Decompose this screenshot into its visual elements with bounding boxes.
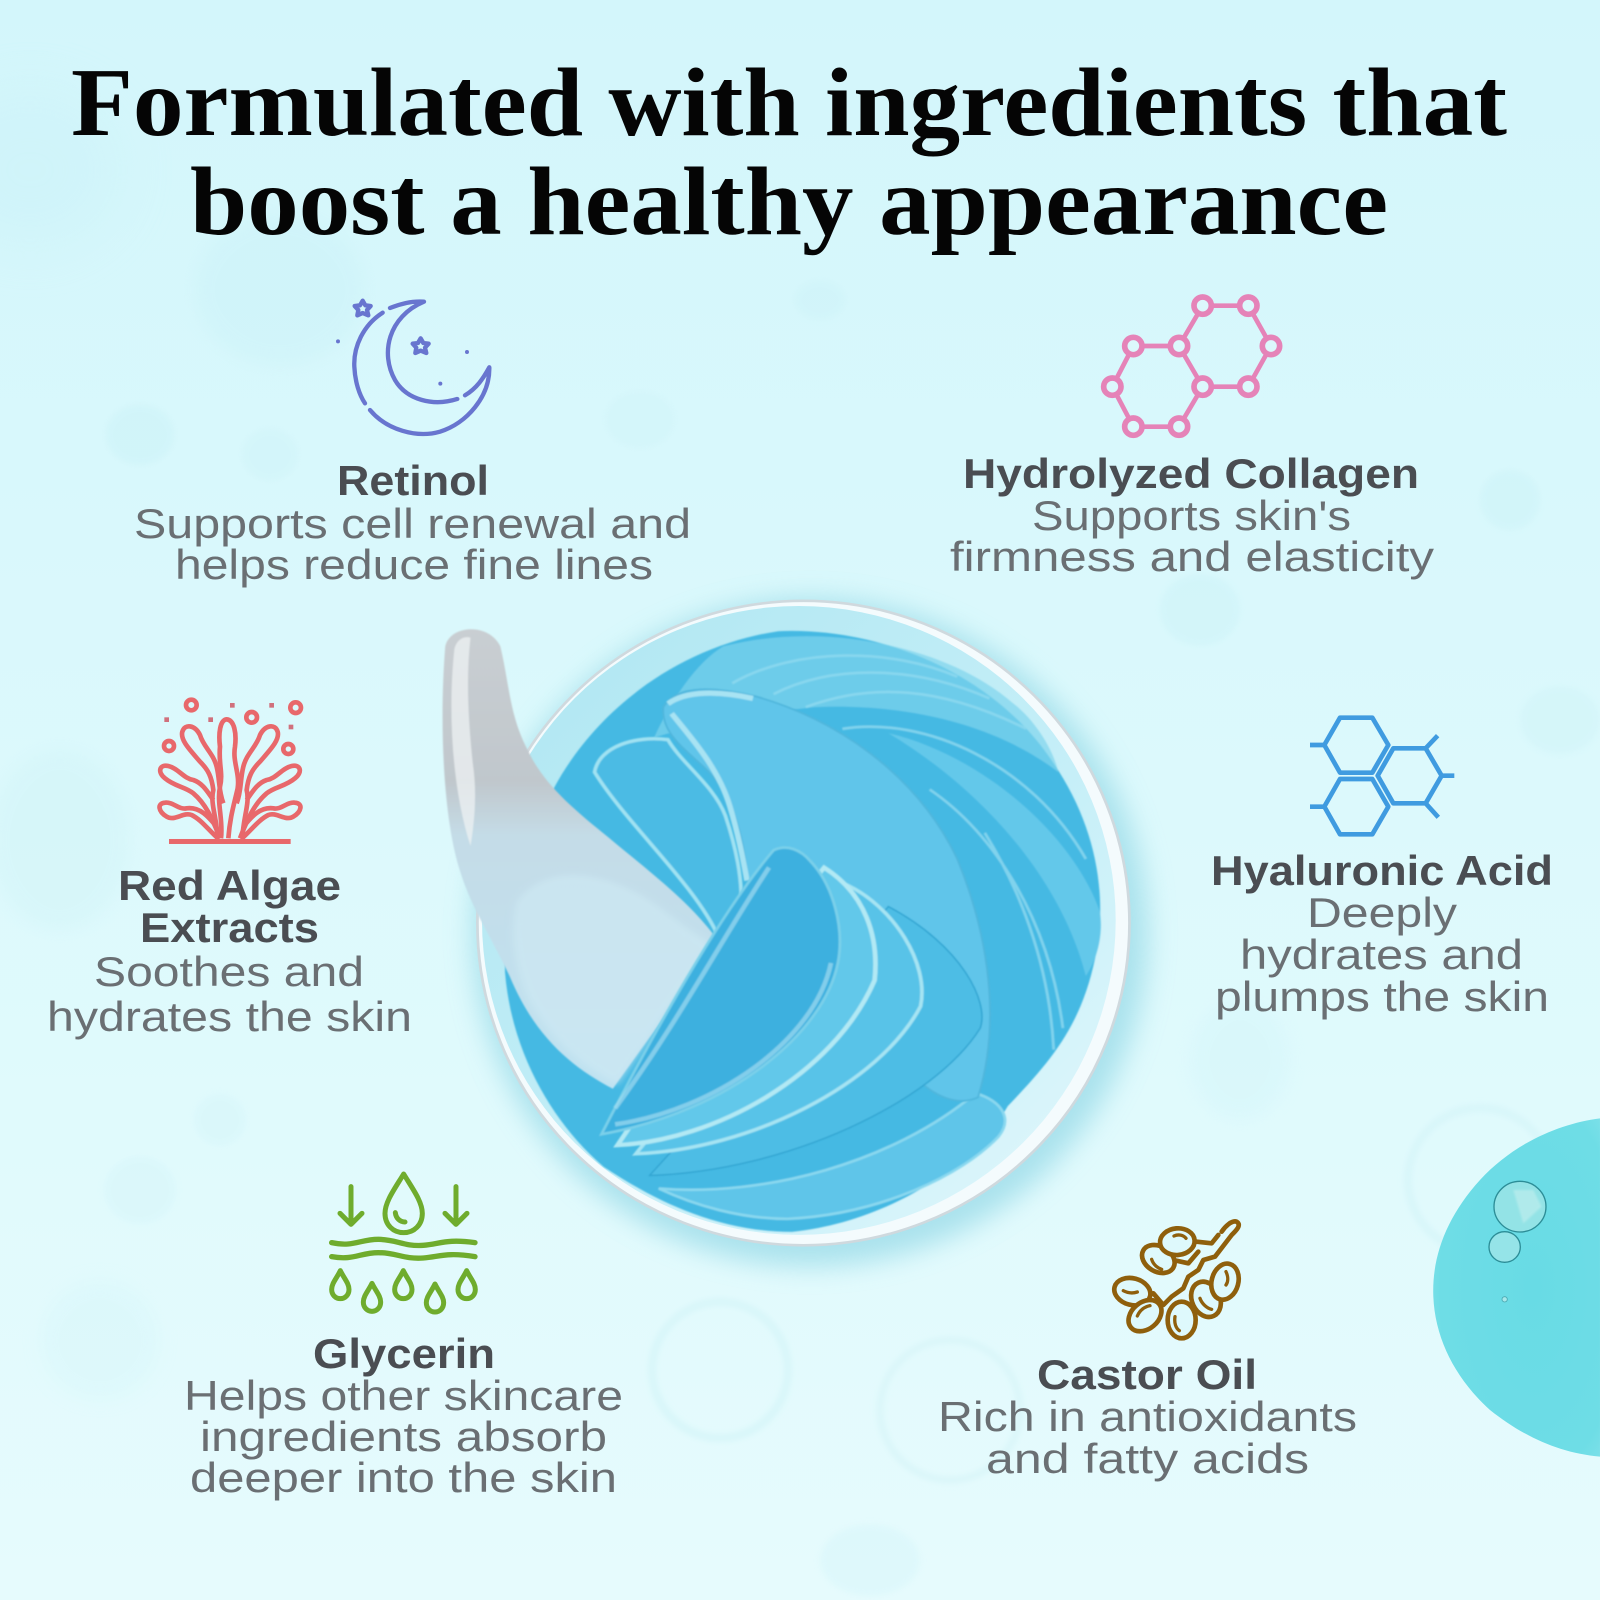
bowl [477, 601, 1129, 1245]
description: Retinol: helps reduce fine lines [175, 541, 653, 588]
large central gel patch [663, 689, 990, 1101]
heading: Red Algae Extracts: Red Algae [118, 862, 341, 909]
description: Retinol [134, 500, 691, 588]
description: Red Algae Extracts [47, 948, 412, 1040]
icon: castor beans branch [1111, 1221, 1243, 1338]
description: Red Algae Extracts: hydrates the skin [47, 993, 412, 1040]
heading: Glycerin: Glycerin [313, 1330, 495, 1377]
title: boost a healthy appearance [190, 148, 1388, 256]
title [71, 49, 1507, 256]
description: Hyaluronic Acid [1215, 889, 1549, 1020]
description: Glycerin: Helps other skincare [184, 1372, 623, 1419]
icon: coral algae [160, 700, 301, 844]
description: Glycerin: deeper into the skin [190, 1454, 617, 1501]
gel patch mass [505, 631, 1101, 1232]
icon: water drops absorbing [332, 1174, 475, 1312]
description: Hydrolyzed Collagen: Supports skin's [1032, 492, 1351, 539]
description: Hydrolyzed Collagen: firmness and elasticity [950, 533, 1434, 580]
description: Hydrolyzed Collagen [950, 492, 1434, 580]
description: Red Algae Extracts: Soothes and [94, 948, 364, 995]
spatula [443, 629, 718, 1089]
icon: crescent moon and stars [336, 301, 489, 434]
ingredient: Glycerin [184, 1174, 623, 1501]
description: Hyaluronic Acid: plumps the skin [1215, 973, 1549, 1020]
droplet of serum at right edge [1433, 1118, 1600, 1457]
heading: Castor Oil: Castor Oil [1037, 1351, 1257, 1398]
front gel patch stack [601, 848, 982, 1175]
ingredient: Retinol [134, 301, 691, 588]
title: Formulated with ingredients that [71, 49, 1507, 157]
description: Castor Oil: Rich in antioxidants [938, 1393, 1357, 1440]
description: Castor Oil [938, 1393, 1357, 1482]
ingredient: Hydrolyzed Collagen [950, 297, 1434, 580]
description: Glycerin: ingredients absorb [200, 1413, 607, 1460]
heading: Hyaluronic Acid: Hyaluronic Acid [1211, 847, 1553, 894]
bowl shadow [473, 599, 1148, 1267]
ingredient: Castor Oil [938, 1221, 1357, 1482]
product: bowl of blue under-eye gel patches with spatula [443, 599, 1148, 1267]
left gel patch [594, 739, 741, 937]
ingredient: Hyaluronic Acid [1211, 718, 1553, 1020]
heading: Retinol: Retinol [337, 457, 489, 504]
ingredient: Red Algae Extracts [47, 700, 412, 1040]
description: Castor Oil: and fatty acids [986, 1435, 1309, 1482]
description: Hyaluronic Acid: hydrates and [1240, 931, 1523, 978]
description: Hyaluronic Acid: Deeply [1307, 889, 1457, 936]
heading: Red Algae Extracts: Extracts [140, 904, 319, 951]
icon: molecule [1104, 297, 1280, 435]
icon: hexagon cluster [1310, 718, 1454, 834]
heading: Red Algae Extracts [118, 862, 341, 951]
description: Retinol: Supports cell renewal and [134, 500, 691, 547]
heading: Hydrolyzed Collagen: Hydrolyzed Collagen [963, 450, 1419, 497]
description: Glycerin [184, 1372, 623, 1501]
